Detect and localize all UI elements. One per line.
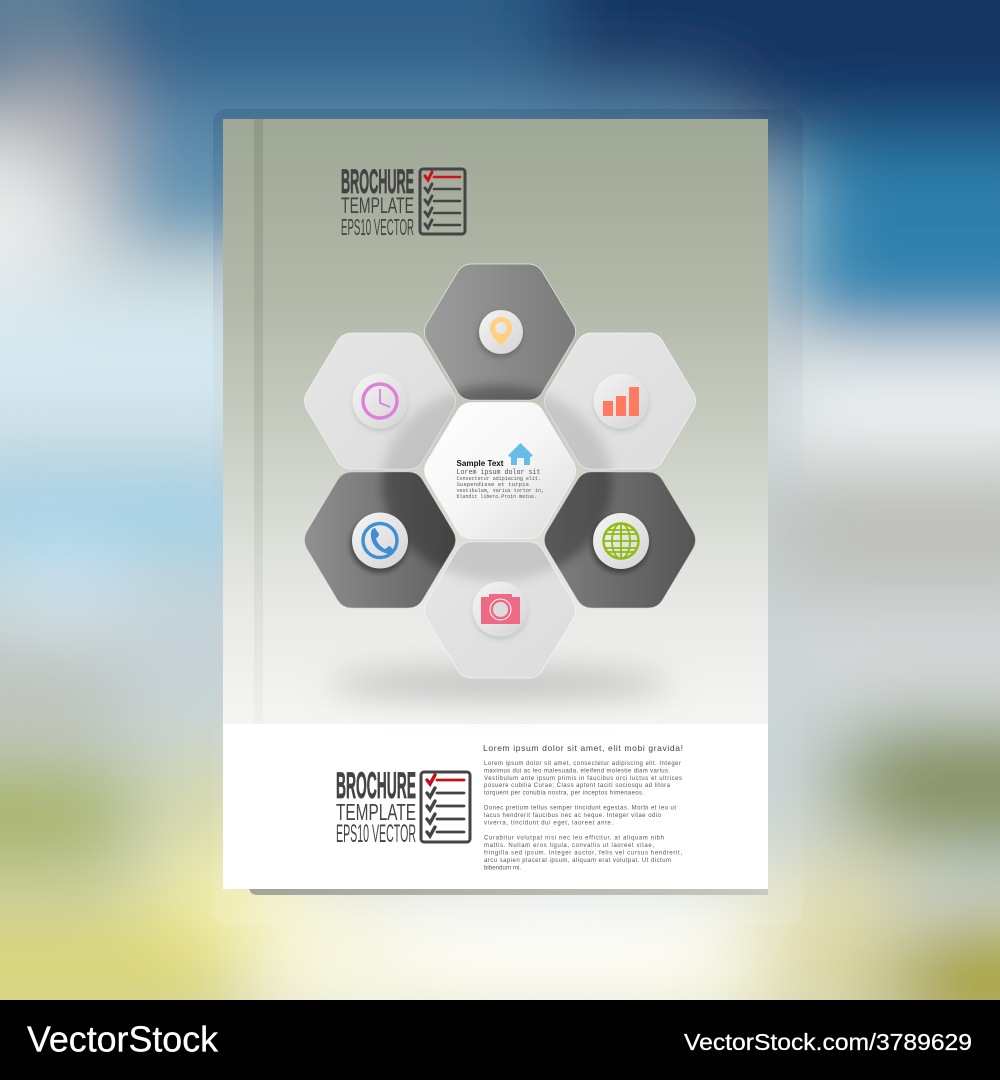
top logo wordmark: TEMPLATE xyxy=(341,193,414,218)
paragraph 1: maximus dui ac leo malesuada, eleifend molestie diam varius. xyxy=(484,768,670,774)
bottom logo checklist icon xyxy=(421,772,470,842)
bottom logo xyxy=(336,765,470,848)
centre body text: Consectetur adipiacing elit. xyxy=(456,476,541,482)
paragraph 1: torquent per conubia nostra, per inceptos himenaeos. xyxy=(484,790,644,796)
top logo checklist icon xyxy=(420,169,465,234)
bottom logo wordmark: TEMPLATE xyxy=(336,799,416,825)
paragraph 3: bibendum mi. xyxy=(484,866,521,872)
icon: bar chart xyxy=(603,387,639,416)
centre body text: Suspendisse et turpis xyxy=(456,482,529,488)
hexagon: centre white xyxy=(424,402,576,538)
icon: camera xyxy=(481,594,520,624)
paragraph 3: Curabitur volutpat nisi nec leo efficitur, at aliquam nibh xyxy=(484,836,664,842)
hexagon: top dark xyxy=(424,264,576,400)
paragraph 3: mattis. Nullam eros ligula, convallis ut laoreet vitae, xyxy=(484,843,654,849)
centre body text: blandit libero.Proin metus. xyxy=(456,494,537,500)
centre body text: Lorem ipsum dolor sit xyxy=(456,469,540,477)
icon disc: clock xyxy=(352,374,408,432)
icon: globe xyxy=(604,524,638,558)
centre text block xyxy=(456,458,544,500)
brochure cover xyxy=(223,119,768,895)
bottom logo: BROCHURE xyxy=(336,765,416,806)
top logo wordmark xyxy=(341,163,414,240)
hexagon diagram xyxy=(304,264,696,678)
hexagon: upper right light xyxy=(544,333,696,469)
icon disc: camera xyxy=(472,582,528,640)
footer image id: VectorStock.com/3789629 xyxy=(684,1029,972,1055)
hexagon: upper left light xyxy=(304,333,456,469)
paragraph 3: arcu sapien placerat ipsum, aliquam erat volutpat. Ut dictum xyxy=(484,858,671,864)
centre heading: Sample Text xyxy=(456,458,504,468)
cover lower white panel xyxy=(223,724,768,889)
centre shadow on dark hexagons xyxy=(382,385,612,581)
top logo xyxy=(341,163,465,240)
spine fold xyxy=(254,119,263,725)
icon disc: bar chart xyxy=(593,374,649,432)
bottom edge shadow xyxy=(249,885,768,895)
icon: location pin xyxy=(490,317,512,346)
centre body text: vestibulum, varius tortor in, xyxy=(456,488,544,494)
hexagon: lower left dark xyxy=(304,472,456,608)
paragraph 2: viverra, tincidunt dui eget, laoreet ante. xyxy=(484,820,613,826)
paragraph 1: posuere cubilia Curae; Class aptent taciti sociosqu ad litora xyxy=(484,783,671,789)
bottom logo: EPS10 VECTOR xyxy=(336,820,416,848)
icon disc: phone xyxy=(350,512,408,573)
paragraph 2 xyxy=(484,806,676,826)
lower text column xyxy=(483,743,683,872)
ground shadow xyxy=(330,670,670,698)
paragraph 2: Donec pretium tellus semper tincidunt egestas. Morbi et leo ut xyxy=(484,806,676,812)
paragraph 3 xyxy=(484,836,682,872)
centre body text xyxy=(456,469,544,500)
paragraph 3: fringilla sed ipsum. Integer auctor, felis vel cursus hendrerit, xyxy=(484,850,682,856)
icon disc: globe xyxy=(591,513,649,573)
hexagon: bottom light xyxy=(424,542,576,678)
paragraph 1 xyxy=(484,761,682,796)
paragraph 2: lacus hendrerit faucibus nec ac neque. Integer vitae odio xyxy=(484,813,662,819)
paragraph 1: Lorem ipsum dolor sit amet, consectetur adipiscing elit. Integer xyxy=(484,761,681,767)
icon: phone xyxy=(363,524,397,558)
top logo: EPS10 VECTOR xyxy=(341,214,414,240)
icon: clock xyxy=(363,384,397,418)
cover upper area xyxy=(223,119,768,725)
centre shadow on light hexagons xyxy=(382,385,612,581)
paragraph 1: Vestibulum ante ipsum primis in faucibus orci luctus et ultrices xyxy=(484,776,682,782)
bottom logo wordmark xyxy=(336,765,416,848)
icon: home xyxy=(508,443,533,465)
top logo: BROCHURE xyxy=(341,163,414,201)
footer bar xyxy=(0,1000,1000,1080)
hexagon: lower right dark xyxy=(544,472,696,608)
lower column heading: Lorem ipsum dolor sit amet, elit mobi gravida! xyxy=(483,743,683,753)
footer brand: VectorStock xyxy=(27,1018,219,1060)
icon disc: location pin xyxy=(477,310,523,358)
translucent brochure backing xyxy=(213,109,803,925)
